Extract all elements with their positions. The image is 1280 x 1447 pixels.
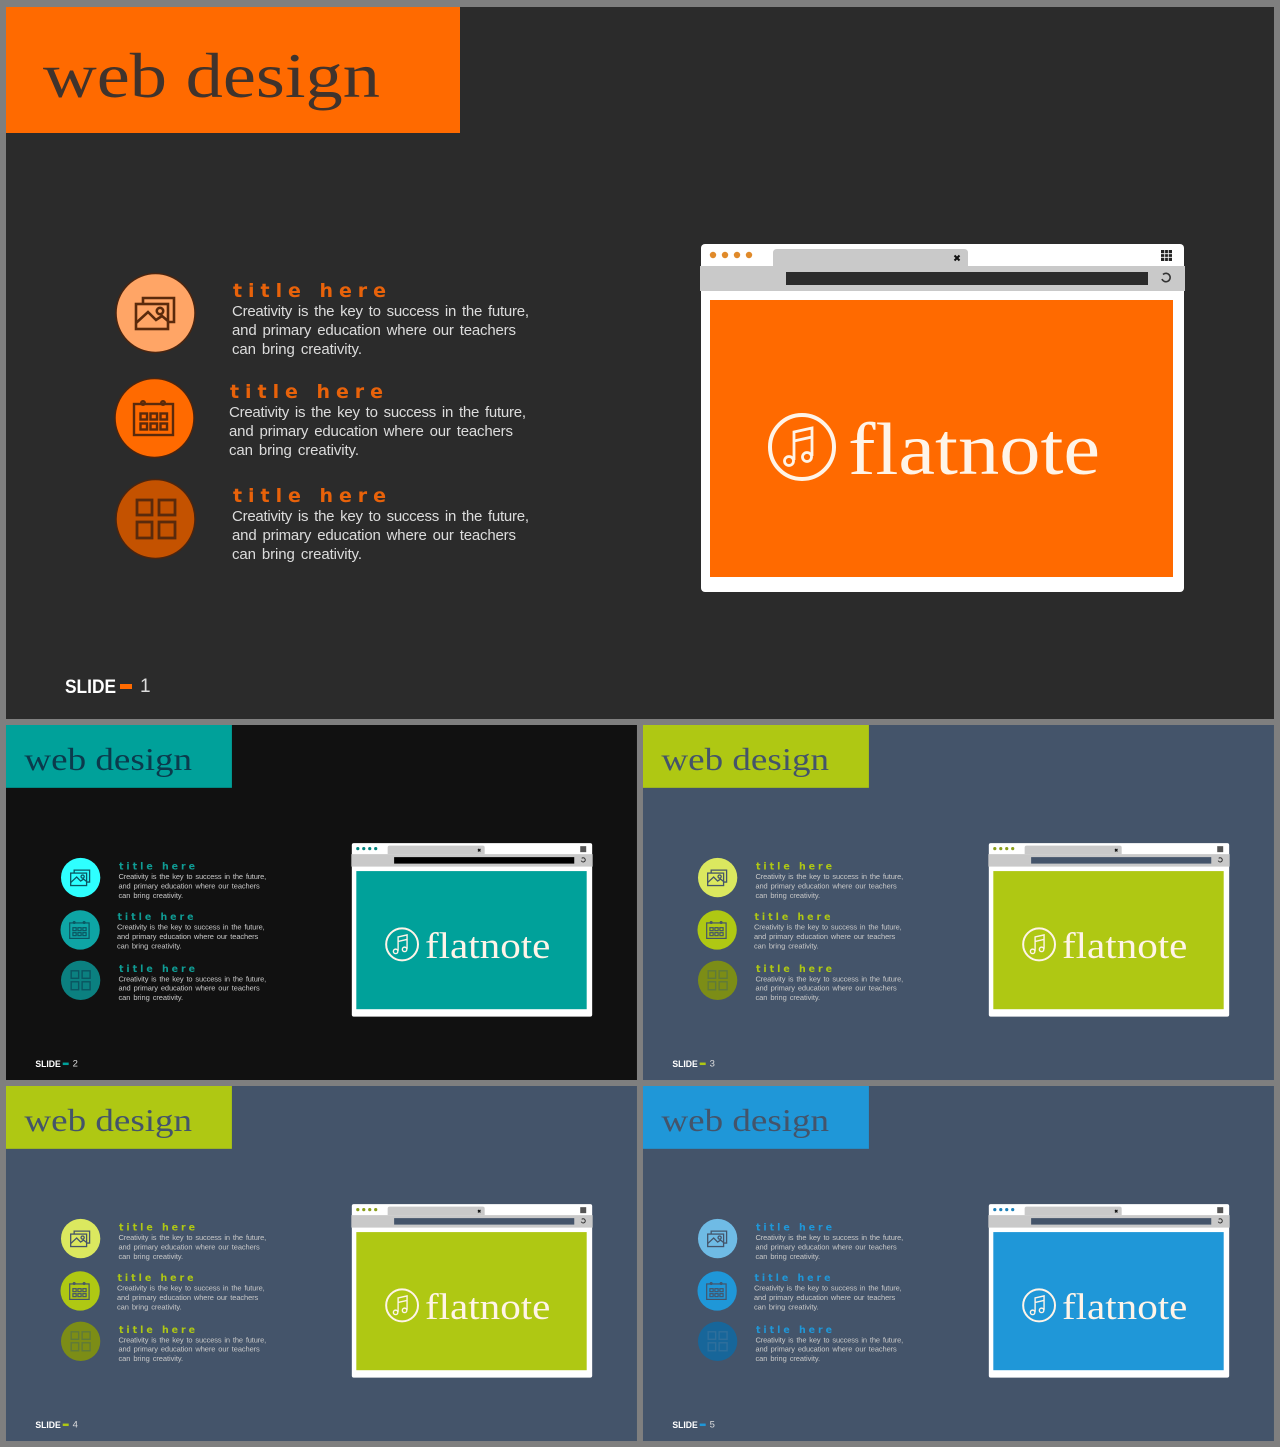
text block 1 [755, 1223, 903, 1261]
heading: web design [643, 1086, 869, 1149]
heading: web design: web design [661, 742, 829, 777]
text block 1: title here [119, 862, 195, 873]
text block 2: can bring creativity. [754, 941, 819, 950]
text block 1: can bring creativity. [232, 341, 362, 358]
icon: calendar [60, 910, 100, 950]
slide number: SLIDE [35, 1420, 61, 1431]
icon: calendar [60, 1271, 100, 1311]
icon: image [61, 1219, 100, 1258]
heading: web design [6, 1086, 232, 1149]
text block 2: title here [230, 381, 383, 403]
logo: flatnote: flatnote [425, 1286, 550, 1327]
slide number: SLIDE [35, 1059, 61, 1070]
text block 1: and primary education where our teachers [755, 882, 897, 891]
heading: web design: web design [43, 40, 380, 111]
text block 2: can bring creativity. [229, 442, 359, 459]
text block 3: can bring creativity. [755, 993, 820, 1002]
icon: grid [61, 961, 100, 1000]
heading: web design [6, 725, 232, 788]
text block 3: can bring creativity. [118, 993, 183, 1002]
text block 3: title here [756, 1325, 832, 1336]
text block 2: and primary education where our teachers [754, 932, 896, 941]
slide number: 2 [73, 1059, 78, 1070]
text block 3 [232, 485, 529, 563]
icon: image [698, 1219, 737, 1258]
text block 2: and primary education where our teachers [229, 423, 513, 440]
icon: calendar [697, 1271, 737, 1311]
text block 3 [755, 964, 903, 1002]
text block 2: can bring creativity. [754, 1302, 819, 1311]
text block 3: Creativity is the key to success in the future, [118, 1335, 266, 1344]
text block 2: Creativity is the key to success in the future, [754, 922, 902, 931]
text block 2: Creativity is the key to success in the future, [754, 1283, 902, 1292]
heading: web design [643, 725, 869, 788]
text block 3 [118, 964, 266, 1002]
text block 3 [118, 1325, 266, 1363]
text block 1: title here [233, 280, 386, 302]
logo: flatnote [1023, 1286, 1187, 1327]
text block 1: title here [756, 1223, 832, 1234]
text block 2: title here [754, 1273, 831, 1284]
text block 1: and primary education where our teachers [232, 322, 516, 339]
text block 3: and primary education where our teachers [232, 527, 516, 544]
text block 3: can bring creativity. [755, 1354, 820, 1363]
text block 1 [118, 1223, 266, 1261]
text block 1: Creativity is the key to success in the future, [118, 872, 266, 881]
text block 1: Creativity is the key to success in the future, [755, 1233, 903, 1242]
text block 2: can bring creativity. [117, 1302, 182, 1311]
slide 4: lime on slate [6, 1086, 637, 1441]
browser mockup [988, 1204, 1230, 1378]
text block 2: title here [117, 1273, 194, 1284]
text block 2: title here [754, 912, 831, 923]
text block 1: and primary education where our teachers [755, 1243, 897, 1252]
icon: calendar [115, 378, 194, 458]
text block 3: Creativity is the key to success in the future, [755, 974, 903, 983]
text block 3: title here [119, 1325, 195, 1336]
icon: grid [698, 961, 737, 1000]
slide 3: lime on slate [643, 725, 1274, 1080]
text block 2 [117, 1273, 265, 1311]
icon: grid [698, 1322, 737, 1361]
slide 2: teal on black [6, 725, 637, 1080]
text block 2 [754, 912, 902, 950]
text block 1 [232, 280, 529, 358]
slide number: SLIDE [672, 1059, 698, 1070]
text block 1: title here [756, 862, 832, 873]
slide number: 4 [73, 1420, 78, 1431]
icon: image [116, 274, 195, 352]
icon: grid [61, 1322, 100, 1361]
browser mockup [700, 244, 1185, 592]
text block 1: can bring creativity. [755, 1252, 820, 1261]
icon: grid [116, 480, 195, 558]
text block 3: can bring creativity. [232, 546, 362, 563]
text block 3: title here [756, 964, 832, 975]
slide number: SLIDE [672, 1420, 698, 1431]
text block 1: Creativity is the key to success in the future, [118, 1233, 266, 1242]
icon: image [698, 858, 737, 897]
text block 2 [117, 912, 265, 950]
slide number [65, 676, 151, 698]
logo: flatnote: flatnote [425, 925, 550, 966]
slide number [35, 1420, 78, 1431]
text block 2: Creativity is the key to success in the future, [117, 1283, 265, 1292]
slide number: 5 [710, 1420, 715, 1431]
text block 1 [118, 862, 266, 900]
slide number: 3 [710, 1059, 715, 1070]
text block 3: title here [119, 964, 195, 975]
browser mockup [351, 1204, 593, 1378]
text block 2: Creativity is the key to success in the future, [229, 404, 526, 421]
heading: web design [6, 7, 460, 133]
text block 2 [229, 381, 526, 459]
browser mockup [351, 843, 593, 1017]
text block 1: can bring creativity. [755, 891, 820, 900]
logo: flatnote [386, 925, 550, 966]
slide number [672, 1420, 715, 1431]
icon: image [61, 858, 100, 897]
text block 2 [754, 1273, 902, 1311]
text block 1: can bring creativity. [118, 891, 183, 900]
logo: flatnote [1023, 925, 1187, 966]
text block 2: title here [117, 912, 194, 923]
text block 3: and primary education where our teachers [755, 984, 897, 993]
text block 1: can bring creativity. [118, 1252, 183, 1261]
text block 3: can bring creativity. [118, 1354, 183, 1363]
text block 1: title here [119, 1223, 195, 1234]
logo: flatnote: flatnote [848, 409, 1100, 491]
logo: flatnote [770, 409, 1100, 491]
slide number: 1 [140, 676, 151, 697]
slide 5: blue on slate [643, 1086, 1274, 1441]
text block 3: and primary education where our teachers [118, 1345, 260, 1354]
text block 1: Creativity is the key to success in the future, [232, 303, 529, 320]
heading: web design: web design [24, 1103, 192, 1138]
icon: calendar [697, 910, 737, 950]
text block 3: Creativity is the key to success in the future, [755, 1335, 903, 1344]
heading: web design: web design [661, 1103, 829, 1138]
text block 2: Creativity is the key to success in the future, [117, 922, 265, 931]
text block 1: and primary education where our teachers [118, 882, 260, 891]
text block 3 [755, 1325, 903, 1363]
text block 3: Creativity is the key to success in the future, [232, 508, 529, 525]
browser mockup [988, 843, 1230, 1017]
logo: flatnote: flatnote [1062, 925, 1187, 966]
text block 2: and primary education where our teachers [754, 1293, 896, 1302]
logo: flatnote [386, 1286, 550, 1327]
slide number: SLIDE [65, 677, 116, 698]
text block 3: Creativity is the key to success in the future, [118, 974, 266, 983]
text block 2: and primary education where our teachers [117, 1293, 259, 1302]
text block 1: Creativity is the key to success in the future, [755, 872, 903, 881]
text block 2: and primary education where our teachers [117, 932, 259, 941]
logo: flatnote: flatnote [1062, 1286, 1187, 1327]
slide 1: orange on charcoal [6, 7, 1274, 719]
text block 2: can bring creativity. [117, 941, 182, 950]
text block 3: and primary education where our teachers [755, 1345, 897, 1354]
text block 1 [755, 862, 903, 900]
slide number [35, 1059, 78, 1070]
slide number [672, 1059, 715, 1070]
text block 3: title here [233, 485, 386, 507]
text block 3: and primary education where our teachers [118, 984, 260, 993]
heading: web design: web design [24, 742, 192, 777]
text block 1: and primary education where our teachers [118, 1243, 260, 1252]
